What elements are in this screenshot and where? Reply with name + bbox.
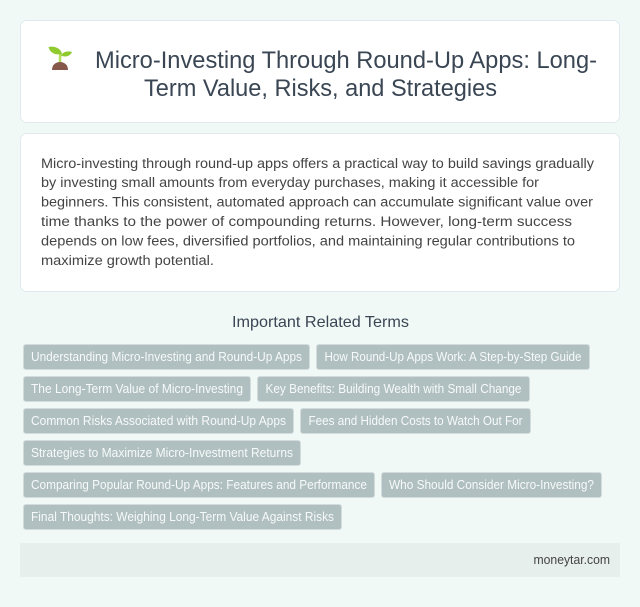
tag: Who Should Consider Micro-Investing? <box>389 477 594 492</box>
tag <box>24 472 374 498</box>
summary paragraph: by investing small amounts from everyday purchases, making it accessible for <box>41 175 539 191</box>
tag <box>316 344 590 370</box>
title: Term Value, Risks, and Strategies <box>144 75 497 102</box>
tag <box>24 504 342 530</box>
summary paragraph: Micro-investing through round-up apps offers a practical way to build savings gradually <box>41 156 595 172</box>
tag: Strategies to Maximize Micro-Investment Returns <box>31 445 293 460</box>
tag <box>24 440 300 466</box>
summary paragraph: time thanks to the power of compounding returns. However, long-term success <box>41 214 572 230</box>
tag <box>24 376 250 402</box>
panel: summary text <box>20 134 620 292</box>
tag <box>258 376 530 402</box>
icon: seedling <box>48 47 72 70</box>
footer bar <box>20 543 620 577</box>
tag: Understanding Micro-Investing and Round-Up Apps <box>31 349 302 364</box>
tag: Comparing Popular Round-Up Apps: Features and Performance <box>31 477 367 492</box>
summary paragraph: maximize growth potential. <box>41 253 214 269</box>
heading: important related terms: Important Related Terms <box>232 314 409 331</box>
tag: Final Thoughts: Weighing Long-Term Value Against Risks <box>31 509 334 524</box>
tag <box>24 408 294 434</box>
tag <box>24 344 310 370</box>
summary paragraph: depends on low fees, diversified portfolios, and maintaining regular contributions to <box>41 234 575 250</box>
tag <box>382 472 602 498</box>
tag <box>300 408 530 434</box>
tag: Key Benefits: Building Wealth with Small Change <box>266 381 522 396</box>
tag list <box>24 344 602 530</box>
summary paragraph <box>41 156 595 269</box>
panel: title header <box>20 20 620 122</box>
tag: Fees and Hidden Costs to Watch Out For <box>308 413 523 428</box>
footer source: moneytar.com <box>534 552 610 567</box>
tag: Common Risks Associated with Round-Up Apps <box>31 413 286 428</box>
title: Micro-Investing Through Round-Up Apps: Long- <box>95 47 597 74</box>
tag: The Long-Term Value of Micro-Investing <box>31 381 243 396</box>
title <box>95 47 597 102</box>
tag: How Round-Up Apps Work: A Step-by-Step Guide <box>324 349 582 364</box>
summary paragraph: beginners. This consistent, automated approach can accumulate significant value over <box>41 194 593 210</box>
